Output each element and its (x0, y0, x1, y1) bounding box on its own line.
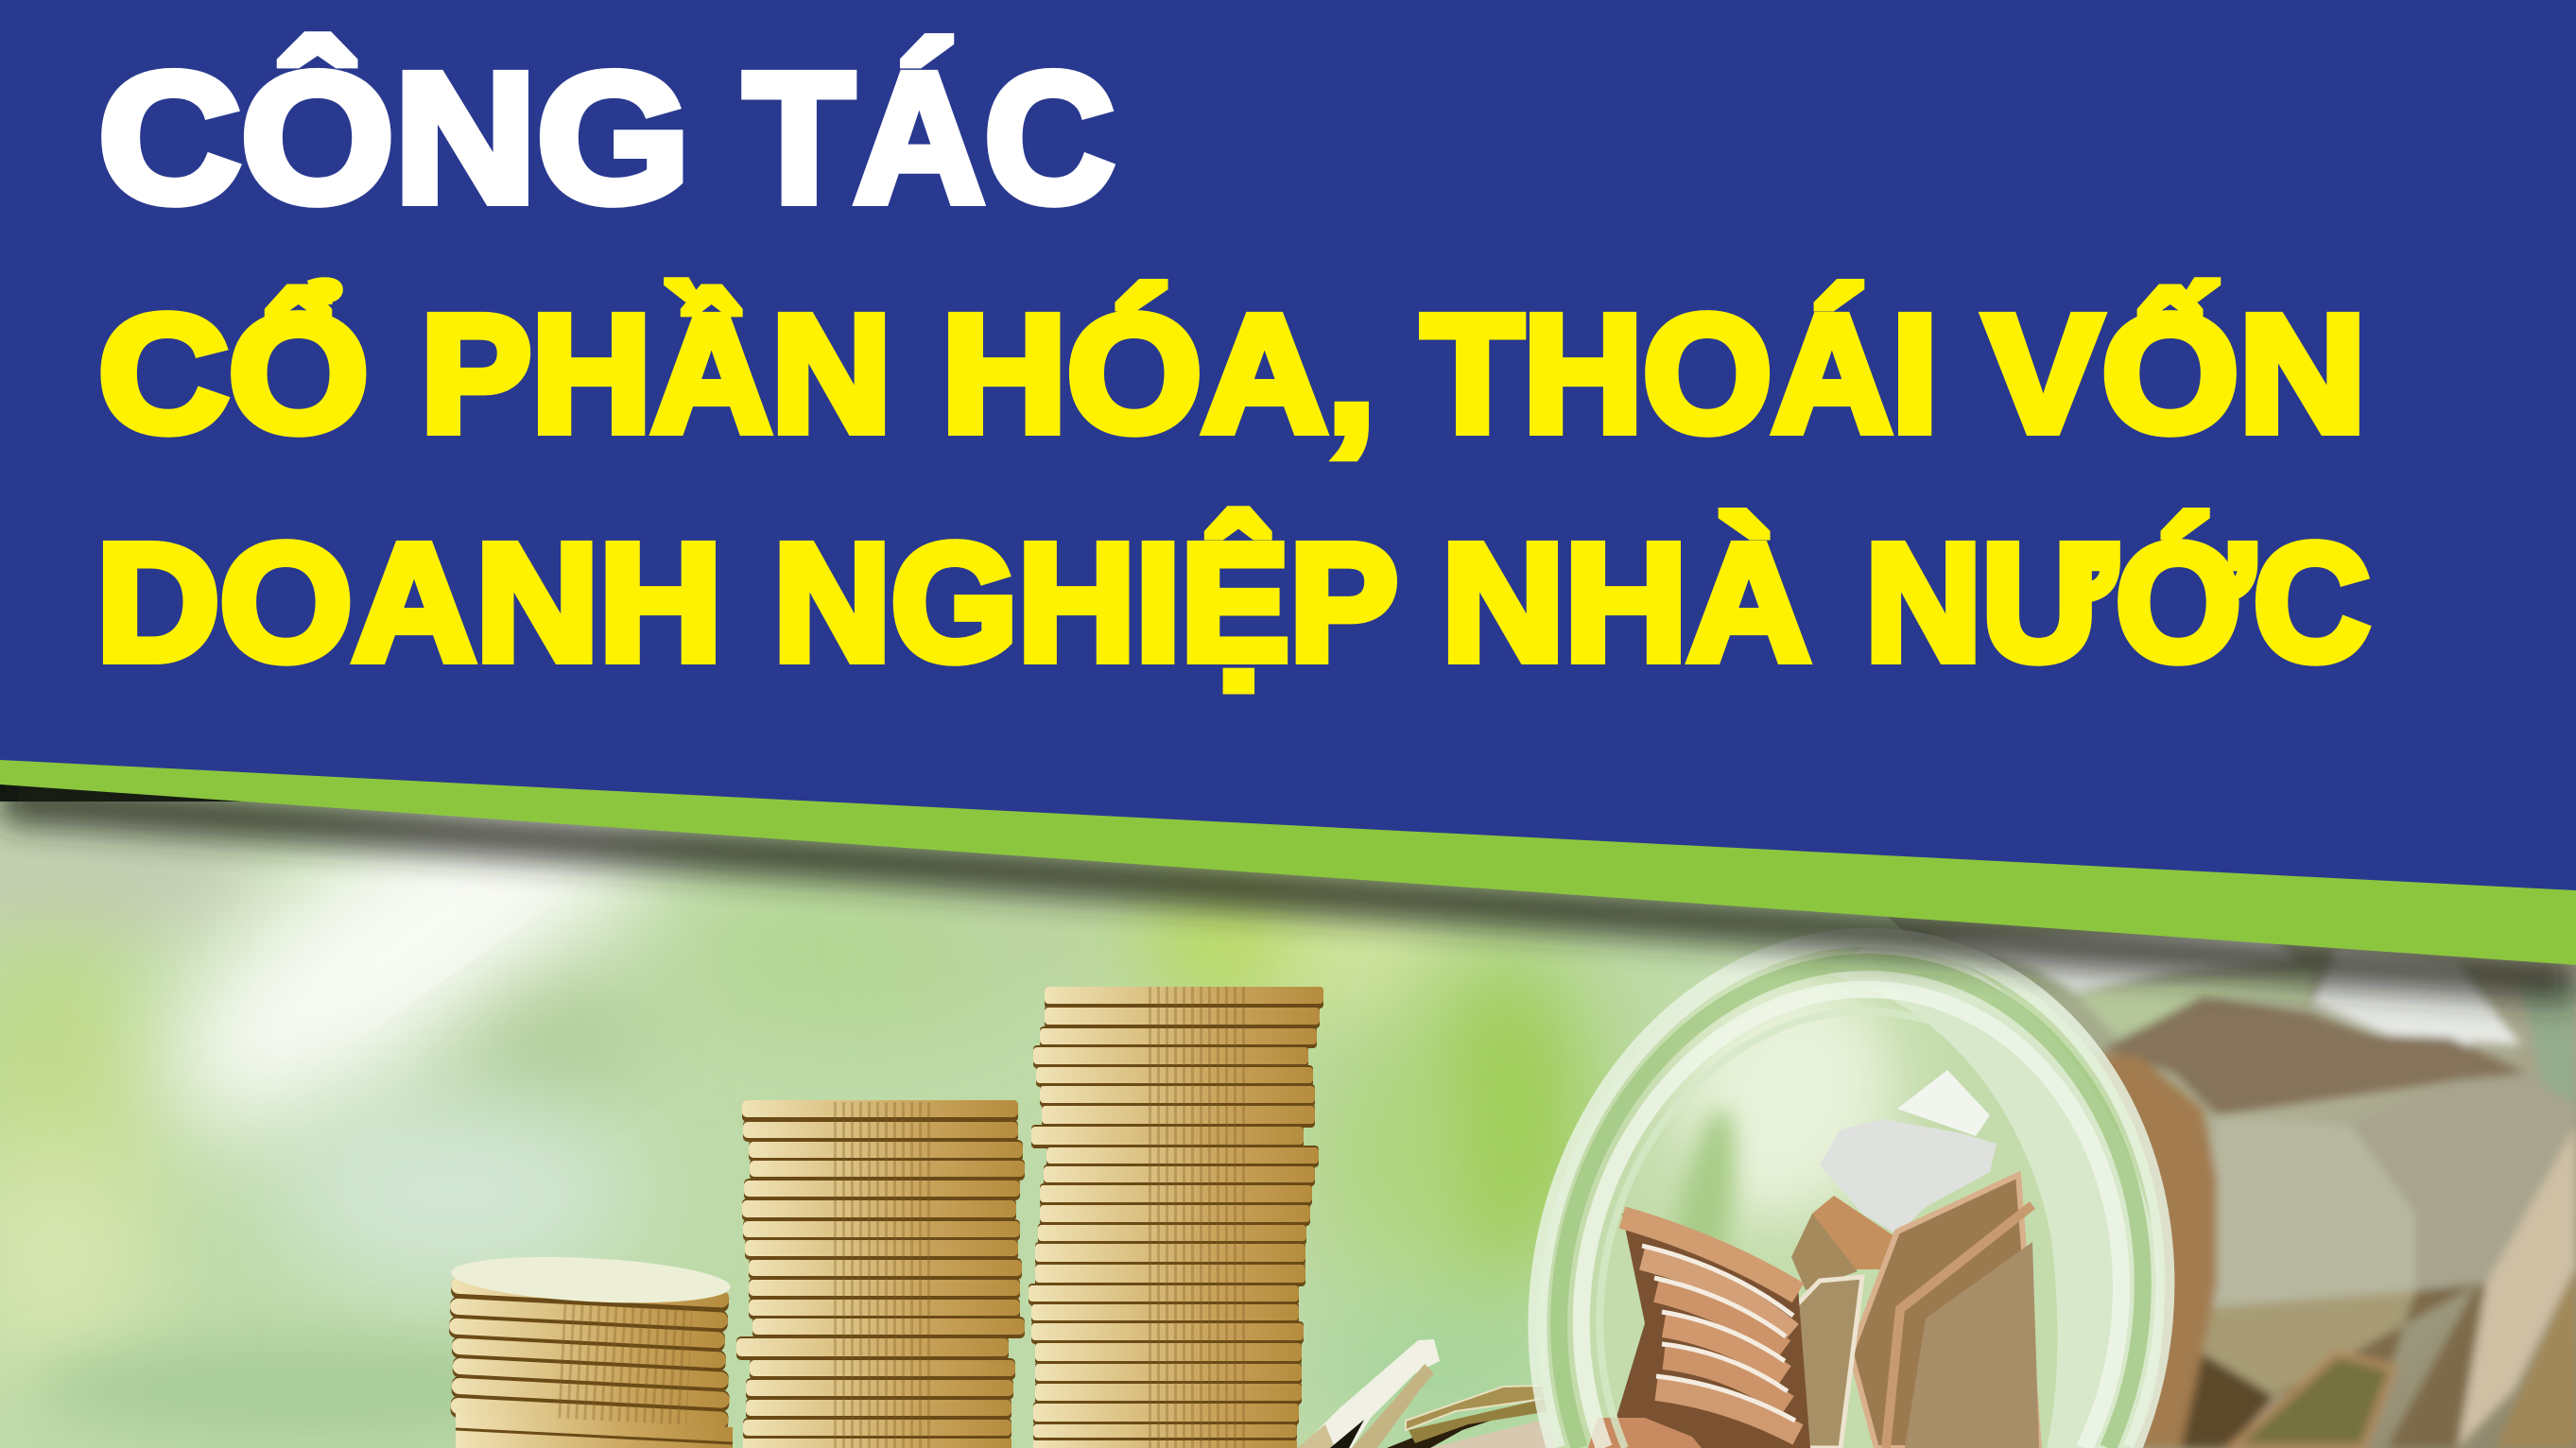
title line 2: yellow: HÓA, (942, 282, 1375, 467)
silver coin and pale coin behind (1897, 1070, 1990, 1136)
spilled striped copper coins (1607, 1214, 1810, 1448)
photo: glass jar with coins (1537, 907, 2576, 1448)
photo: spilled flat coins (1297, 1339, 1621, 1448)
photo: coin stack small (left) (443, 1250, 736, 1448)
title line 2: yellow: THOÁI (1422, 282, 1938, 467)
coins standing in jar mouth (1791, 1214, 1858, 1290)
title line 3: yellow: DOANH (96, 510, 722, 696)
title line 3: yellow (96, 510, 2370, 696)
banner shadow on photo (0, 780, 2576, 1002)
title line 3: yellow: NGHIỆP (773, 510, 1398, 696)
green diagonal band (0, 756, 2576, 965)
jar body (1876, 907, 2576, 1448)
title line 1: white (98, 35, 1115, 241)
title line 1: white: TÁC (744, 35, 1115, 241)
blue header panel (0, 0, 2576, 890)
title line 2: yellow: CỔ (98, 282, 369, 467)
title (96, 35, 2370, 696)
photo: coin stack medium (centre) (736, 1100, 1025, 1448)
title line 3: yellow: NƯỚC (1865, 510, 2370, 696)
title line 1: white: CÔNG (98, 35, 690, 241)
photo: coin stack tall (right) (1029, 987, 1323, 1448)
jar mouth interior (1537, 938, 2165, 1448)
glass walls and rim rings (1537, 938, 2165, 1448)
photo background: blurred green bokeh (0, 671, 2576, 1448)
title line 2: yellow: PHẦN (421, 282, 891, 467)
title line 2: yellow: VỐN (1984, 282, 2366, 467)
title line 3: yellow: NHÀ (1442, 510, 1810, 696)
title line 2: yellow (98, 282, 2366, 467)
jar contents behind the glass wall (1926, 936, 2576, 1448)
